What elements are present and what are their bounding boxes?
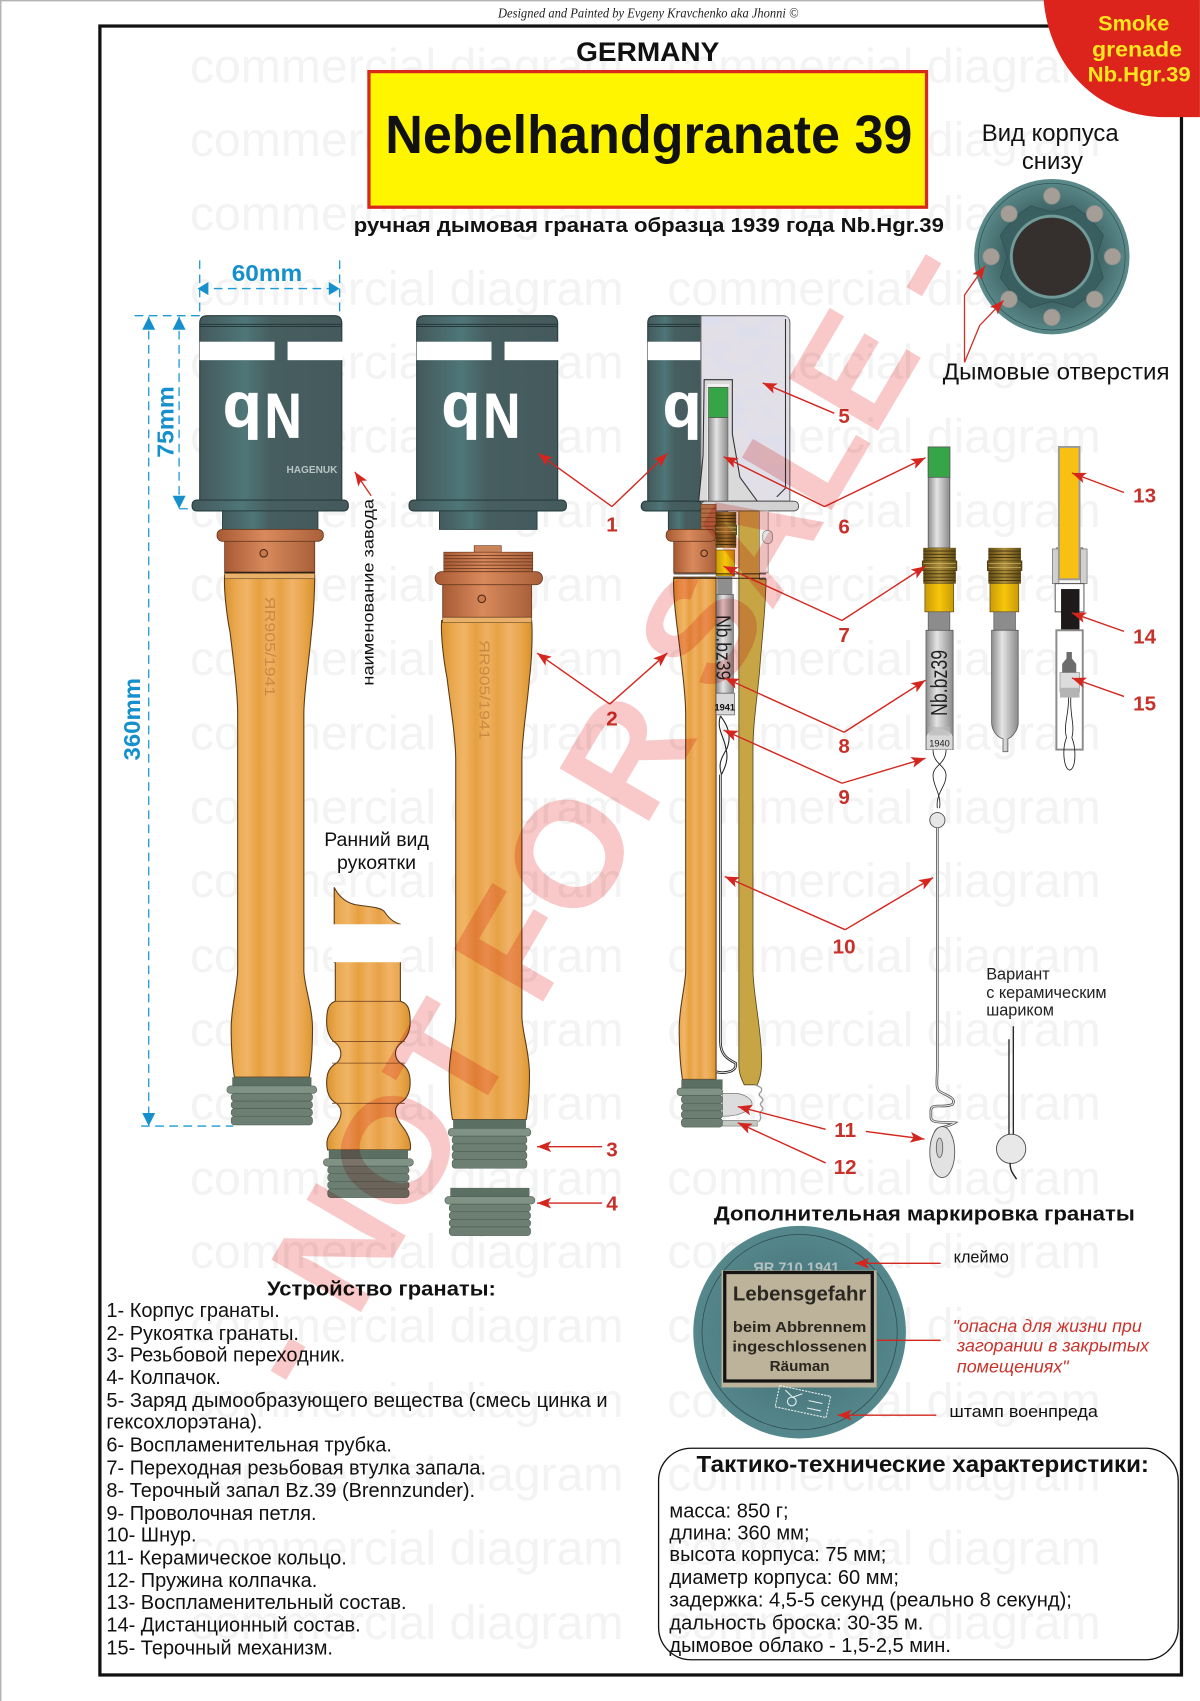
marking note: brand: клеймо	[954, 1249, 1009, 1267]
bottom view heading: снизу	[1022, 148, 1083, 175]
watermark: commercial diagram: commercial diagram	[667, 558, 1101, 612]
stamp text on disc: ЯR 710 1941	[753, 1260, 839, 1276]
corner badge: Smoke	[1098, 10, 1169, 35]
cutaway igniter composition	[1059, 447, 1079, 579]
section: wire	[716, 716, 736, 1073]
callout 1	[538, 453, 667, 537]
parts list: 6- Воспламенительная трубка.	[106, 1434, 392, 1456]
watermark: commercial diagram: commercial diagram	[667, 409, 1101, 463]
callout 6: 6	[838, 516, 850, 539]
grenade 1 body: HAGENUK	[286, 465, 338, 476]
parts list heading: Устройство гранаты:	[267, 1277, 496, 1300]
section: smoke charge	[701, 316, 790, 501]
corner badge: grenade	[1092, 36, 1182, 61]
grenade 1: assembled	[192, 316, 348, 1125]
watermark: commercial diagram: commercial diagram	[667, 187, 1101, 241]
parts list: 9- Проволочная петля.	[106, 1503, 317, 1525]
watermark: commercial diagram: commercial diagram	[190, 1448, 623, 1502]
section: copper collar	[666, 504, 716, 573]
section: ceramic ring in cap	[723, 1094, 752, 1116]
parts list: 3- Резьбовой переходник.	[106, 1344, 345, 1366]
section: fuse: 1941	[714, 703, 735, 713]
specifications text: высота корпуса: 75 мм;	[669, 1544, 886, 1566]
section: handle wall	[739, 511, 766, 1085]
watermark: commercial diagram: commercial diagram	[667, 1299, 1101, 1353]
grenade 2 copper collar and thread	[435, 546, 543, 623]
warning label	[722, 1270, 877, 1387]
watermark: commercial diagram: commercial diagram	[667, 1374, 1101, 1428]
watermark: commercial diagram	[190, 39, 1101, 1650]
variant label: шариком	[986, 1001, 1054, 1019]
specifications text: задержка: 4,5-5 секунд (реально 8 секунд);	[669, 1590, 1072, 1612]
watermark: commercial diagram: commercial diagram	[190, 409, 623, 463]
cutaway striker	[1060, 652, 1079, 698]
cutaway upper frame	[1055, 584, 1084, 612]
pull cord	[931, 828, 955, 1150]
watermark: commercial diagram: commercial diagram	[190, 780, 623, 834]
callout 11	[738, 1107, 924, 1142]
watermark: commercial diagram: commercial diagram	[190, 707, 623, 761]
fuse green tip	[928, 447, 950, 477]
grenade 3: cross-section	[641, 316, 799, 1127]
fuse body	[926, 630, 953, 750]
heading: GERMANY: GERMANY	[576, 36, 719, 67]
wire loop with ball	[930, 750, 946, 828]
dimension: 360mm: 360mm	[119, 678, 145, 760]
parts list: 12- Пружина колпачка.	[106, 1570, 317, 1592]
callout 14: 14	[1133, 625, 1157, 648]
section: fuse: Nb.bz39	[712, 615, 735, 680]
parts list: 11- Керамическое кольцо.	[106, 1547, 347, 1569]
fuse without igniter	[987, 548, 1022, 752]
watermark: commercial diagram: commercial diagram	[667, 929, 1101, 983]
parts list: 4- Колпачок.	[106, 1367, 221, 1389]
watermark: commercial diagram: commercial diagram	[667, 1151, 1101, 1205]
callout 12: 12	[834, 1156, 857, 1179]
callout 8	[725, 678, 925, 758]
watermark: commercial diagram: commercial diagram	[667, 1003, 1101, 1057]
watermark: commercial diagram: commercial diagram	[190, 1077, 623, 1131]
callout 15	[1072, 678, 1156, 716]
cutaway wire	[1064, 698, 1075, 770]
heading: additional markings: Дополнительная маркировка гранаты	[714, 1202, 1135, 1225]
grenade 1 handle stamp: ЯR905/1941	[261, 597, 278, 696]
callout 10: 10	[833, 936, 856, 959]
parts list: 8- Терочный запал Bz.39 (Brennzunder).	[106, 1480, 475, 1502]
callout 1: 1	[606, 514, 618, 537]
specifications text: масса: 850 г;	[669, 1501, 789, 1523]
early handle heading: рукоятки	[337, 852, 416, 874]
corner badge	[1044, 0, 1200, 117]
fuse body: Nb.bz39	[926, 650, 952, 716]
specifications text	[669, 1501, 1072, 1657]
watermark: commercial diagram: commercial diagram	[667, 632, 1101, 686]
callout 14	[1072, 613, 1157, 648]
watermark: commercial diagram: commercial diagram	[190, 1003, 623, 1057]
callout 7	[724, 566, 925, 647]
watermark: commercial diagram: commercial diagram	[667, 39, 1101, 93]
bottom view of body	[974, 179, 1130, 334]
grenade 2 handle stamp: ЯR905/1941	[476, 640, 493, 740]
grenade 2 cap	[445, 1188, 535, 1236]
watermark: commercial diagram: commercial diagram	[190, 484, 623, 538]
grenade 2 body: q	[442, 370, 480, 440]
fuse cutaway	[1052, 447, 1087, 770]
dimension: 60mm: 60mm	[232, 260, 302, 286]
callout 3: 3	[606, 1138, 618, 1161]
cutaway lower frame	[1056, 630, 1083, 750]
grenade 1 body: q	[223, 370, 261, 440]
specifications heading: Тактико-технические характеристики:	[697, 1451, 1149, 1477]
parts list: 14- Дистанционный состав.	[106, 1615, 361, 1637]
callout 8: 8	[838, 735, 850, 758]
watermark: commercial diagram: commercial diagram	[190, 39, 623, 93]
watermark: commercial diagram: commercial diagram	[667, 1521, 1101, 1575]
grenade 1 body	[192, 316, 348, 529]
watermark: commercial diagram: commercial diagram	[190, 113, 623, 167]
corner badge: Nb.Hgr.39	[1088, 61, 1191, 86]
section: igniter tube	[699, 380, 757, 512]
callout 11: 11	[834, 1119, 856, 1142]
title plate	[369, 72, 927, 207]
grenade 2 body	[409, 316, 566, 529]
title plate: Nebelhandgranate 39	[385, 105, 912, 165]
parts list: 13- Воспламенительный состав.	[106, 1592, 407, 1614]
callout 15: 15	[1133, 693, 1156, 716]
dimension lines	[135, 260, 340, 1126]
section: body exterior half: q	[663, 370, 701, 440]
callout 5: 5	[838, 405, 850, 428]
markings disc	[693, 1226, 906, 1438]
grenade 1 body: N	[265, 382, 302, 452]
watermark: commercial diagram: commercial diagram	[667, 484, 1101, 538]
bottom view heading	[982, 120, 1119, 175]
marking note: warning translation: загорании в закрытых	[956, 1336, 1150, 1356]
grenade 2 threaded adapter	[448, 1120, 531, 1168]
callout 10	[725, 877, 933, 959]
watermark: commercial diagram: commercial diagram	[190, 1299, 623, 1353]
specifications text: дальность броска: 30-35 м.	[669, 1612, 923, 1634]
section: body exterior half	[641, 316, 702, 529]
warning label: Räuman	[770, 1358, 830, 1375]
parts list: 7- Переходная резьбовая втулка запала.	[106, 1457, 486, 1479]
variant label: Вариант	[986, 966, 1050, 984]
callout 9	[724, 730, 925, 809]
watermark: commercial diagram: commercial diagram	[667, 336, 1101, 390]
callout 3	[537, 1138, 618, 1161]
watermark: commercial diagram: commercial diagram	[190, 854, 623, 908]
fuse brass bushing	[922, 548, 957, 612]
inspector stamp	[775, 1386, 831, 1418]
callout 4: 4	[606, 1193, 618, 1216]
marking note: warning translation: "опасна для жизни при	[953, 1316, 1142, 1336]
callout 13	[1072, 473, 1156, 507]
callout 5	[763, 383, 850, 428]
fuse neck	[928, 612, 950, 630]
watermark: commercial diagram: commercial diagram	[667, 780, 1101, 834]
watermark: commercial diagram: commercial diagram	[667, 1596, 1101, 1650]
factory name label: наименование завода	[360, 499, 377, 686]
warning label: ingeschlossenen	[732, 1339, 867, 1356]
parts list: 1- Корпус гранаты.	[106, 1300, 280, 1322]
watermark: commercial diagram: commercial diagram	[190, 1596, 623, 1650]
warning label: beim Abbrennem	[733, 1319, 866, 1336]
marking note: warning translation: помещениях"	[957, 1356, 1070, 1376]
subtitle: ручная дымовая граната образца 1939 года Nb.Hgr.39	[354, 214, 944, 237]
grenade 2 body: N	[483, 382, 520, 452]
grenade 1 thread	[227, 1077, 317, 1125]
marking note: warning translation	[877, 1316, 1150, 1376]
section: cap collar	[759, 511, 772, 573]
specifications panel	[659, 1448, 1178, 1660]
section: cap spring	[723, 1121, 757, 1126]
cutaway thread outline	[1052, 548, 1087, 584]
parts list: 10- Шнур.	[106, 1525, 197, 1547]
section: fuse	[712, 512, 737, 715]
early handle	[323, 887, 413, 1198]
variant with ceramic ball	[997, 1026, 1026, 1179]
section: thread	[677, 1079, 723, 1127]
watermark: commercial diagram: commercial diagram	[190, 1225, 623, 1279]
parts list: 15- Терочный механизм.	[106, 1637, 333, 1659]
watermark: commercial diagram: commercial diagram	[190, 632, 623, 686]
callout 13: 13	[1133, 484, 1156, 507]
grenade 1 wooden handle	[224, 575, 315, 1077]
section: cap inner thread	[755, 1085, 763, 1122]
watermark: commercial diagram: commercial diagram	[667, 1448, 1101, 1502]
dimension arrows	[142, 282, 340, 1126]
callout 2: 2	[606, 708, 618, 731]
parts list: 5- Заряд дымообразующего вещества (смесь цинка и	[106, 1390, 608, 1412]
watermark: commercial diagram: commercial diagram	[667, 113, 1101, 167]
ceramic ring	[930, 1127, 955, 1178]
parts list: гексохлорэтана).	[106, 1412, 262, 1434]
arrow: factory name	[355, 472, 371, 496]
parts list: 2- Рукоятка гранаты.	[106, 1323, 299, 1345]
smoke holes label and leaders	[943, 266, 1170, 385]
grenade 1 copper collar	[217, 529, 323, 579]
callout 12	[738, 1123, 857, 1179]
warning label: Lebensgefahr	[733, 1284, 867, 1306]
watermark: commercial diagram: commercial diagram	[667, 1225, 1101, 1279]
grenade 2: disassembled	[409, 316, 566, 1236]
section: wood left half	[674, 577, 716, 1079]
callout 7: 7	[838, 624, 850, 647]
marking note: inspector stamp: штамп военпреда	[949, 1403, 1099, 1421]
variant label	[986, 966, 1107, 1019]
watermark: commercial diagram: commercial diagram	[190, 1151, 623, 1205]
callout 4	[537, 1193, 618, 1216]
callout 6	[724, 457, 925, 539]
parts list	[106, 1277, 608, 1659]
watermark: commercial diagram: commercial diagram	[190, 262, 623, 316]
callout 9: 9	[838, 786, 850, 809]
section: flange right half	[701, 501, 799, 511]
pull cord core	[931, 828, 955, 1150]
specifications text: дымовое облако - 1,5-2,5 мин.	[669, 1635, 951, 1657]
watermark: commercial diagram: commercial diagram	[190, 929, 623, 983]
dimension: 75mm: 75mm	[153, 386, 179, 458]
specifications text: длина: 360 мм;	[669, 1522, 810, 1544]
variant label: с керамическим	[986, 984, 1107, 1002]
early handle heading: Ранний вид	[324, 829, 429, 851]
fuse body: 1940	[929, 738, 950, 748]
early handle heading	[324, 829, 429, 874]
bottom view heading: Вид корпуса	[982, 120, 1119, 147]
specifications text: диаметр корпуса: 60 мм;	[669, 1567, 899, 1589]
section: seam line	[674, 574, 766, 578]
callout 2	[537, 653, 667, 731]
watermark: commercial diagram: commercial diagram	[190, 336, 623, 390]
watermark: commercial diagram: commercial diagram	[667, 1077, 1101, 1131]
fuse igniter tube	[928, 447, 950, 548]
watermark: commercial diagram: commercial diagram	[667, 707, 1101, 761]
watermark: commercial diagram: commercial diagram	[190, 1521, 623, 1575]
watermark: NOT FOR SALE: - NOT FOR SALE -	[191, 204, 998, 1416]
watermark: commercial diagram: commercial diagram	[667, 854, 1101, 908]
grenade 2 wooden handle	[441, 621, 532, 1120]
watermark: commercial diagram: commercial diagram	[190, 187, 623, 241]
watermark: commercial diagram: commercial diagram	[190, 558, 623, 612]
watermark: commercial diagram: commercial diagram	[190, 1374, 623, 1428]
free fuse assembly	[922, 447, 957, 1178]
watermark: commercial diagram: commercial diagram	[667, 262, 1101, 316]
cutaway delay composition	[1061, 589, 1079, 630]
credit line: Designed and Painted by Evgeny Kravchenko aka Jhonni ©	[497, 5, 799, 20]
smoke holes label and leaders: Дымовые отверстия	[943, 359, 1170, 385]
